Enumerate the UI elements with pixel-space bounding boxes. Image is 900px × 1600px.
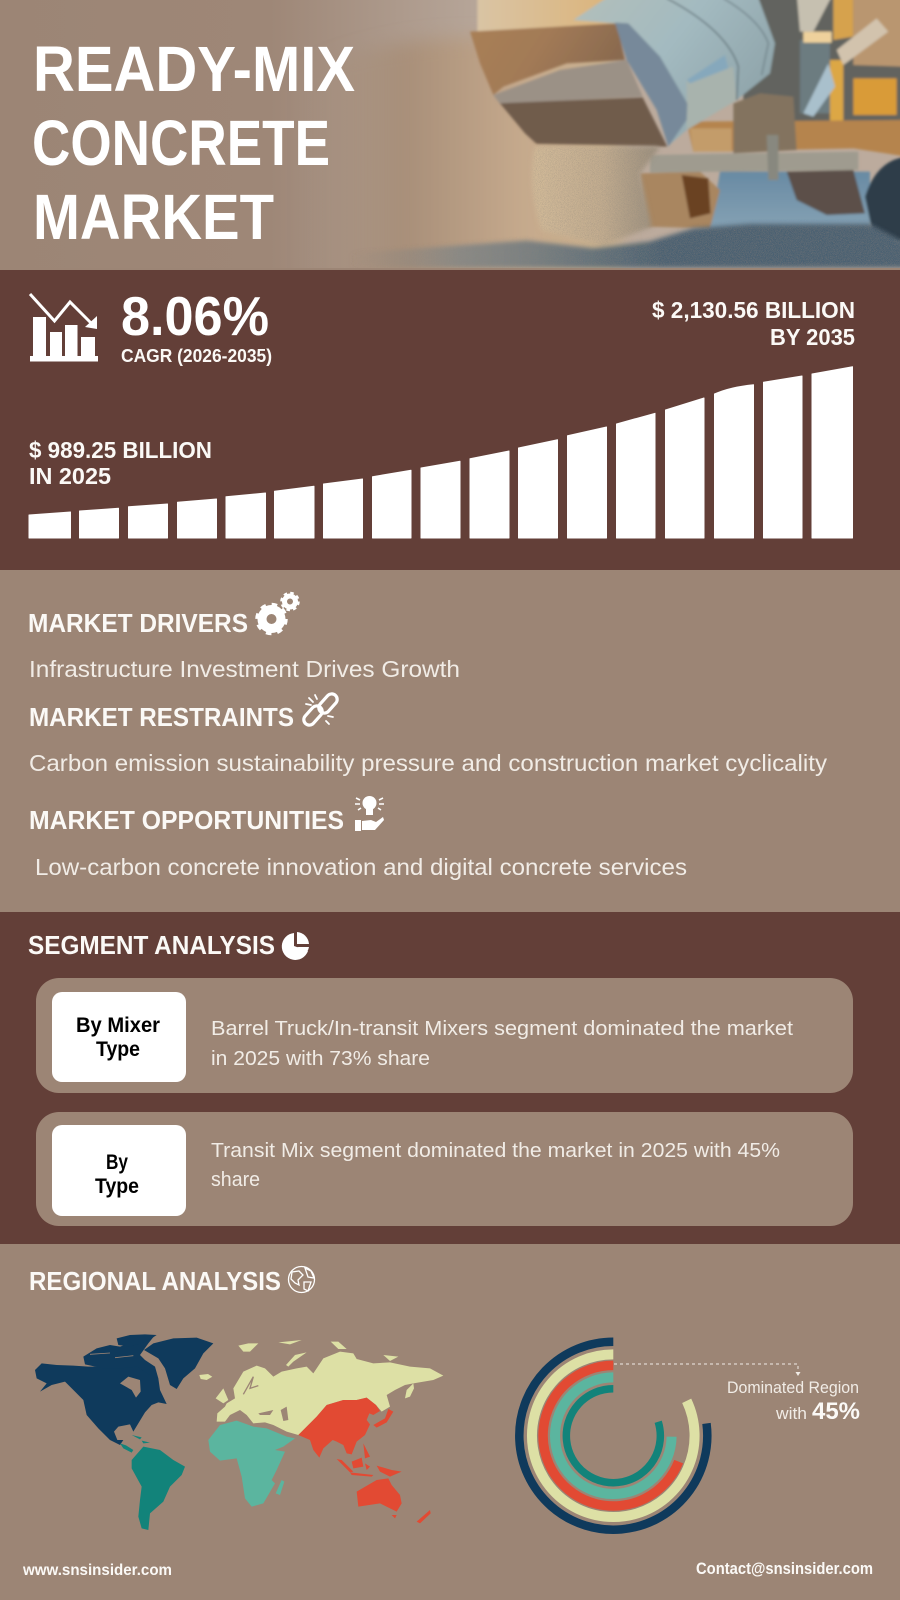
text: type finding: Transit Mix segment dominated the market in 2025 with 45% [211, 1139, 780, 1162]
label: by mixer type [52, 992, 186, 1082]
segment card: by mixer type [36, 978, 853, 1093]
panel: market size and CAGR [0, 270, 900, 570]
2035 value callout [652, 297, 855, 350]
panel: market dynamics [0, 570, 900, 912]
hero photo: concrete mixer pouring [350, 0, 900, 268]
icon: broken chain [302, 692, 339, 727]
footer: website: www.snsinsider.com [22, 1562, 172, 1579]
icon: gears [257, 593, 298, 634]
title: CONCRETE [32, 107, 330, 179]
segment card: by type [36, 1112, 853, 1226]
text: type finding: share [211, 1168, 260, 1191]
2025 value callout [29, 437, 212, 489]
label: by type: By [106, 1151, 128, 1174]
icon: declining bar chart [30, 294, 98, 362]
icon: pie chart [282, 932, 309, 960]
heading: market opportunities: MARKET OPPORTUNITIES [29, 805, 344, 835]
callout: dominated region [727, 1378, 860, 1425]
CAGR label: CAGR (2026-2035) [121, 346, 272, 366]
map region: europe and russia [216, 1340, 443, 1435]
hero dust haze [300, 38, 620, 290]
map region: middle east and africa [208, 1421, 295, 1507]
world map [35, 1334, 443, 1530]
2035 value callout: $ 2,130.56 BILLION [652, 297, 855, 323]
arrow: callout leader line [614, 1364, 800, 1376]
text: type finding [211, 1139, 780, 1191]
label: by type [52, 1125, 186, 1216]
panel: segment analysis [0, 912, 900, 1244]
heading: segment analysis: SEGMENT ANALYSIS [28, 930, 275, 960]
callout: dominated region: with [775, 1404, 807, 1423]
callout: dominated region: 45% [812, 1398, 860, 1425]
map region: latin america [120, 1435, 185, 1530]
label: by type: Type [95, 1175, 139, 1198]
text: mixer type finding: Barrel Truck/In-transit Mixers segment dominated the market [211, 1017, 793, 1040]
map detail: iceland [199, 1374, 212, 1380]
bar chart: market growth [29, 367, 852, 538]
text: mixer type finding: in 2025 with 73% share [211, 1047, 430, 1070]
2025 value callout: IN 2025 [29, 463, 111, 489]
heading: market restraints: MARKET RESTRAINTS [29, 702, 294, 732]
label: by mixer type: By Mixer [76, 1014, 160, 1037]
text: mixer type finding [211, 1017, 793, 1070]
title [32, 33, 355, 253]
text: market restraints: Carbon emission sustainability pressure and construction market cyclicality [29, 750, 828, 776]
radial bar chart [519, 1342, 707, 1530]
map region: north america [35, 1334, 213, 1445]
title: READY-MIX [33, 33, 355, 105]
panel: hero header [0, 0, 900, 290]
icon: idea in hand [355, 796, 384, 831]
footer: contact: Contact@snsinsider.com [696, 1560, 873, 1578]
icon: globe [288, 1266, 314, 1292]
panel: regional analysis [0, 1244, 900, 1600]
2035 value callout: BY 2035 [770, 324, 855, 350]
title: MARKET [33, 181, 274, 253]
heading: market drivers: MARKET DRIVERS [28, 608, 248, 638]
label: by mixer type: Type [96, 1038, 140, 1061]
2025 value callout: $ 989.25 BILLION [29, 437, 212, 463]
text: market drivers: Infrastructure Investment Drives Growth [29, 656, 460, 682]
CAGR value: 8.06% [121, 285, 269, 347]
heading: regional analysis: REGIONAL ANALYSIS [29, 1266, 281, 1296]
callout: dominated region: Dominated Region [727, 1378, 859, 1397]
hero background gradient [0, 0, 900, 270]
hero bottom cover [0, 268, 900, 270]
text: market opportunities: Low-carbon concrete innovation and digital concrete services [35, 854, 687, 880]
map region: asia pacific [298, 1398, 431, 1523]
